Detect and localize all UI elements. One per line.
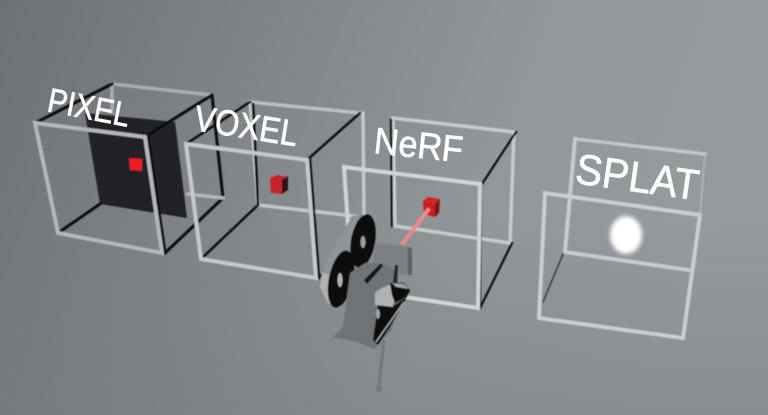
cube: NeRF [344, 118, 516, 308]
lens box [373, 243, 412, 275]
body [333, 263, 400, 349]
reel belt [320, 214, 368, 307]
red voxel cube [270, 175, 288, 194]
cube: splat [539, 139, 705, 338]
label: PIXEL: PIXEL [44, 82, 133, 135]
back reel [346, 212, 380, 270]
red NeRF cube [423, 197, 440, 217]
cube: pixel [35, 84, 223, 253]
label: NeRF: NeRF [372, 120, 465, 170]
handle [379, 340, 384, 386]
label: VOXEL: VOXEL [192, 97, 301, 154]
red pixel [129, 158, 142, 171]
splat glow [610, 216, 642, 254]
camera [320, 212, 412, 392]
black image plane [85, 113, 187, 218]
ray [403, 210, 428, 243]
cube: voxel [186, 102, 364, 278]
mechanism [373, 297, 407, 345]
front reel [323, 248, 359, 310]
label: SPLAT: SPLAT [573, 145, 702, 210]
